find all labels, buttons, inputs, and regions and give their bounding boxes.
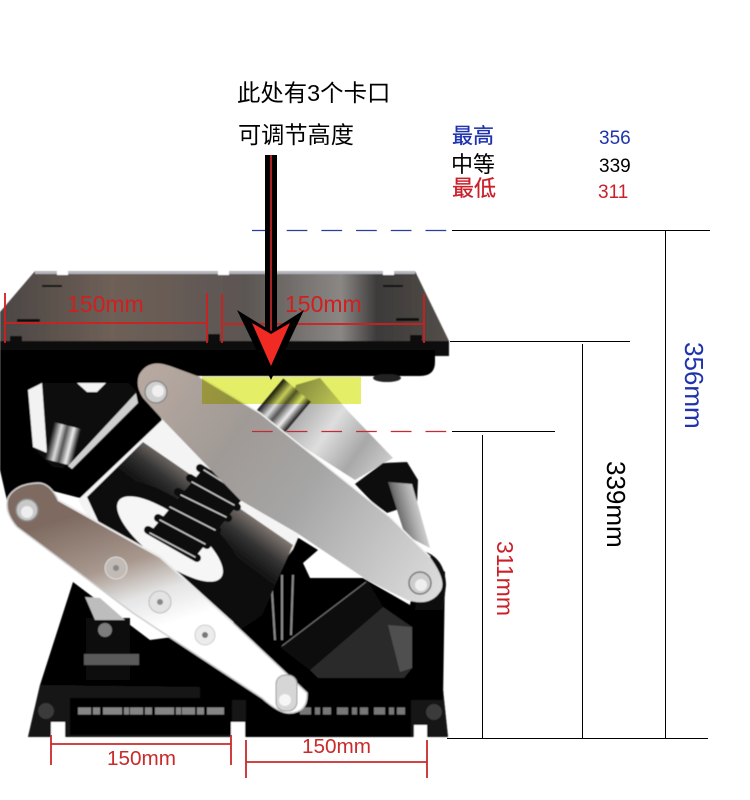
base clamp bolt (84, 597, 139, 680)
legend value: 339: 339 (599, 156, 631, 177)
arm bolts (16, 381, 431, 711)
top plate width dimensions (5, 293, 424, 343)
note: adjustable height: 可调节高度 (238, 122, 354, 148)
label: right base width: 150mm (302, 735, 371, 758)
legend: lowest: 最低 (452, 176, 496, 201)
legend value: 311: 311 (598, 182, 628, 203)
vertical label: 339mm: 339mm (601, 461, 631, 548)
label: left top width: 150mm (67, 291, 144, 317)
base plate (28, 582, 448, 740)
note: three notches: 此处有3个卡口 (237, 80, 390, 106)
height dimension lines (447, 230, 710, 738)
top plate (0, 270, 449, 356)
red dashed line: lowest (252, 430, 447, 432)
spring (148, 468, 247, 558)
legend value: 356: 356 (599, 128, 631, 149)
base width dimensions (51, 735, 427, 778)
vertical label: 311mm: 311mm (492, 541, 518, 616)
blue dashed line: highest (252, 230, 447, 232)
arrow: points at adjustment notch (237, 155, 304, 380)
lower bracket with window (200, 537, 445, 700)
legend: highest: 最高 (452, 125, 494, 148)
vertical label: 356mm: 356mm (679, 342, 709, 429)
label: left base width: 150mm (107, 747, 176, 770)
chrome back plate and tube behind right arm (254, 378, 393, 480)
right roller with black bushing (355, 462, 446, 610)
left chrome arm (7, 483, 307, 713)
oval cut-out (92, 462, 258, 608)
right chrome arm (138, 363, 442, 602)
upper bracket with window (0, 350, 435, 505)
legend: middle: 中等 (451, 152, 495, 177)
product photo: adjustable lift bracket (0, 270, 449, 740)
label: right top width: 150mm (285, 291, 362, 317)
highlight band: notch zone (202, 377, 361, 404)
white strip and central plate (78, 418, 300, 640)
